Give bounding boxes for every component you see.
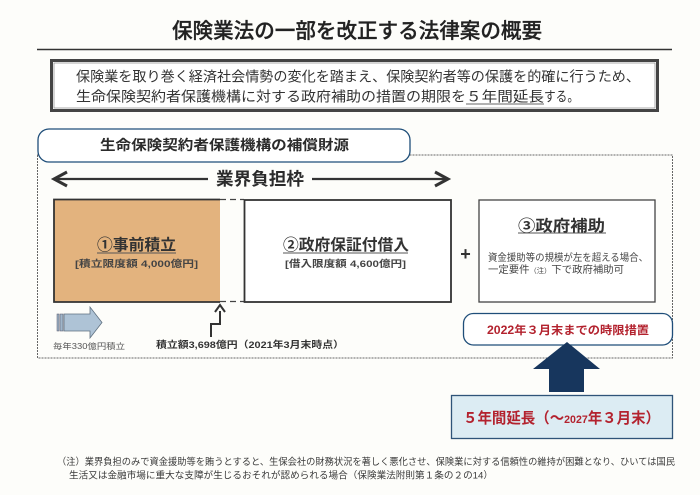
footnote: （注）業界負担のみで資金援助等を賄うとすると、生保会社の財務状況を著しく悪化させ、保険業に対する信頼性の維持が困難となり、ひいては国民 [57, 456, 675, 468]
text: current reserve amount: 積立額3,698億円（2021年3月末時点） [156, 339, 344, 351]
panel: government subsidy: 資金援助等の規模が左を超える場合、 [488, 251, 648, 264]
panel: government subsidy: ③政府補助 [518, 217, 605, 235]
panel: summary [52, 60, 658, 110]
panel: summary: 生命保険契約者保護機構に対する政府補助の措置の期限を [76, 88, 466, 104]
panel: government-guaranteed borrowing [244, 200, 451, 302]
footnote: 生活又は金融市場に重大な支障が生じるおそれが認められる場合（保険業法附則第１条の２の14） [69, 470, 493, 482]
callout: five-year extension [452, 396, 672, 438]
callout: time-limited measure [464, 314, 672, 345]
icon: plus: + [460, 244, 471, 264]
panel: government-guaranteed borrowing: [借入限度額 4,600億円] [285, 258, 406, 270]
panel: advance reserve [54, 200, 220, 302]
dashed connectors between boxes [220, 200, 244, 302]
panel: advance reserve: ①事前積立 [97, 235, 176, 254]
arrow: current reserve pointer [211, 305, 225, 337]
title: 保険業法の一部を改正する法律案の概要 [172, 20, 542, 43]
callout: time-limited measure: 2022年３月末までの時限措置 [487, 323, 650, 337]
arrow: industry burden range [54, 169, 448, 189]
panel: government subsidy: 一定要件（注）下で政府補助可 [488, 263, 624, 276]
heading: funding sources: 生命保険契約者保護機構の補償財源 [100, 137, 349, 153]
footnote [57, 456, 675, 482]
panel: advance reserve: [積立限度額 4,000億円] [75, 258, 198, 270]
callout: five-year extension: ５年間延長（～2027年３月末） [463, 409, 660, 427]
panel: summary: 保険業を取り巻く経済社会情勢の変化を踏まえ、保険契約者等の保護を的確に行うため、 [76, 68, 640, 84]
panel: funding sources dashed frame [38, 155, 672, 358]
panel: summary: する。 [544, 88, 579, 104]
arrow: industry burden range: 業界負担枠 [216, 169, 305, 189]
text: annual accumulation: 毎年330億円積立 [53, 341, 125, 351]
icon: annual accumulation arrow [57, 307, 102, 338]
heading: funding sources [38, 129, 410, 162]
panel: government subsidy [479, 200, 655, 302]
panel: government-guaranteed borrowing: ②政府保証付借入 [283, 236, 409, 254]
panel: summary: ５年間延長 [466, 88, 544, 104]
arrow: extension up arrow [533, 342, 600, 392]
